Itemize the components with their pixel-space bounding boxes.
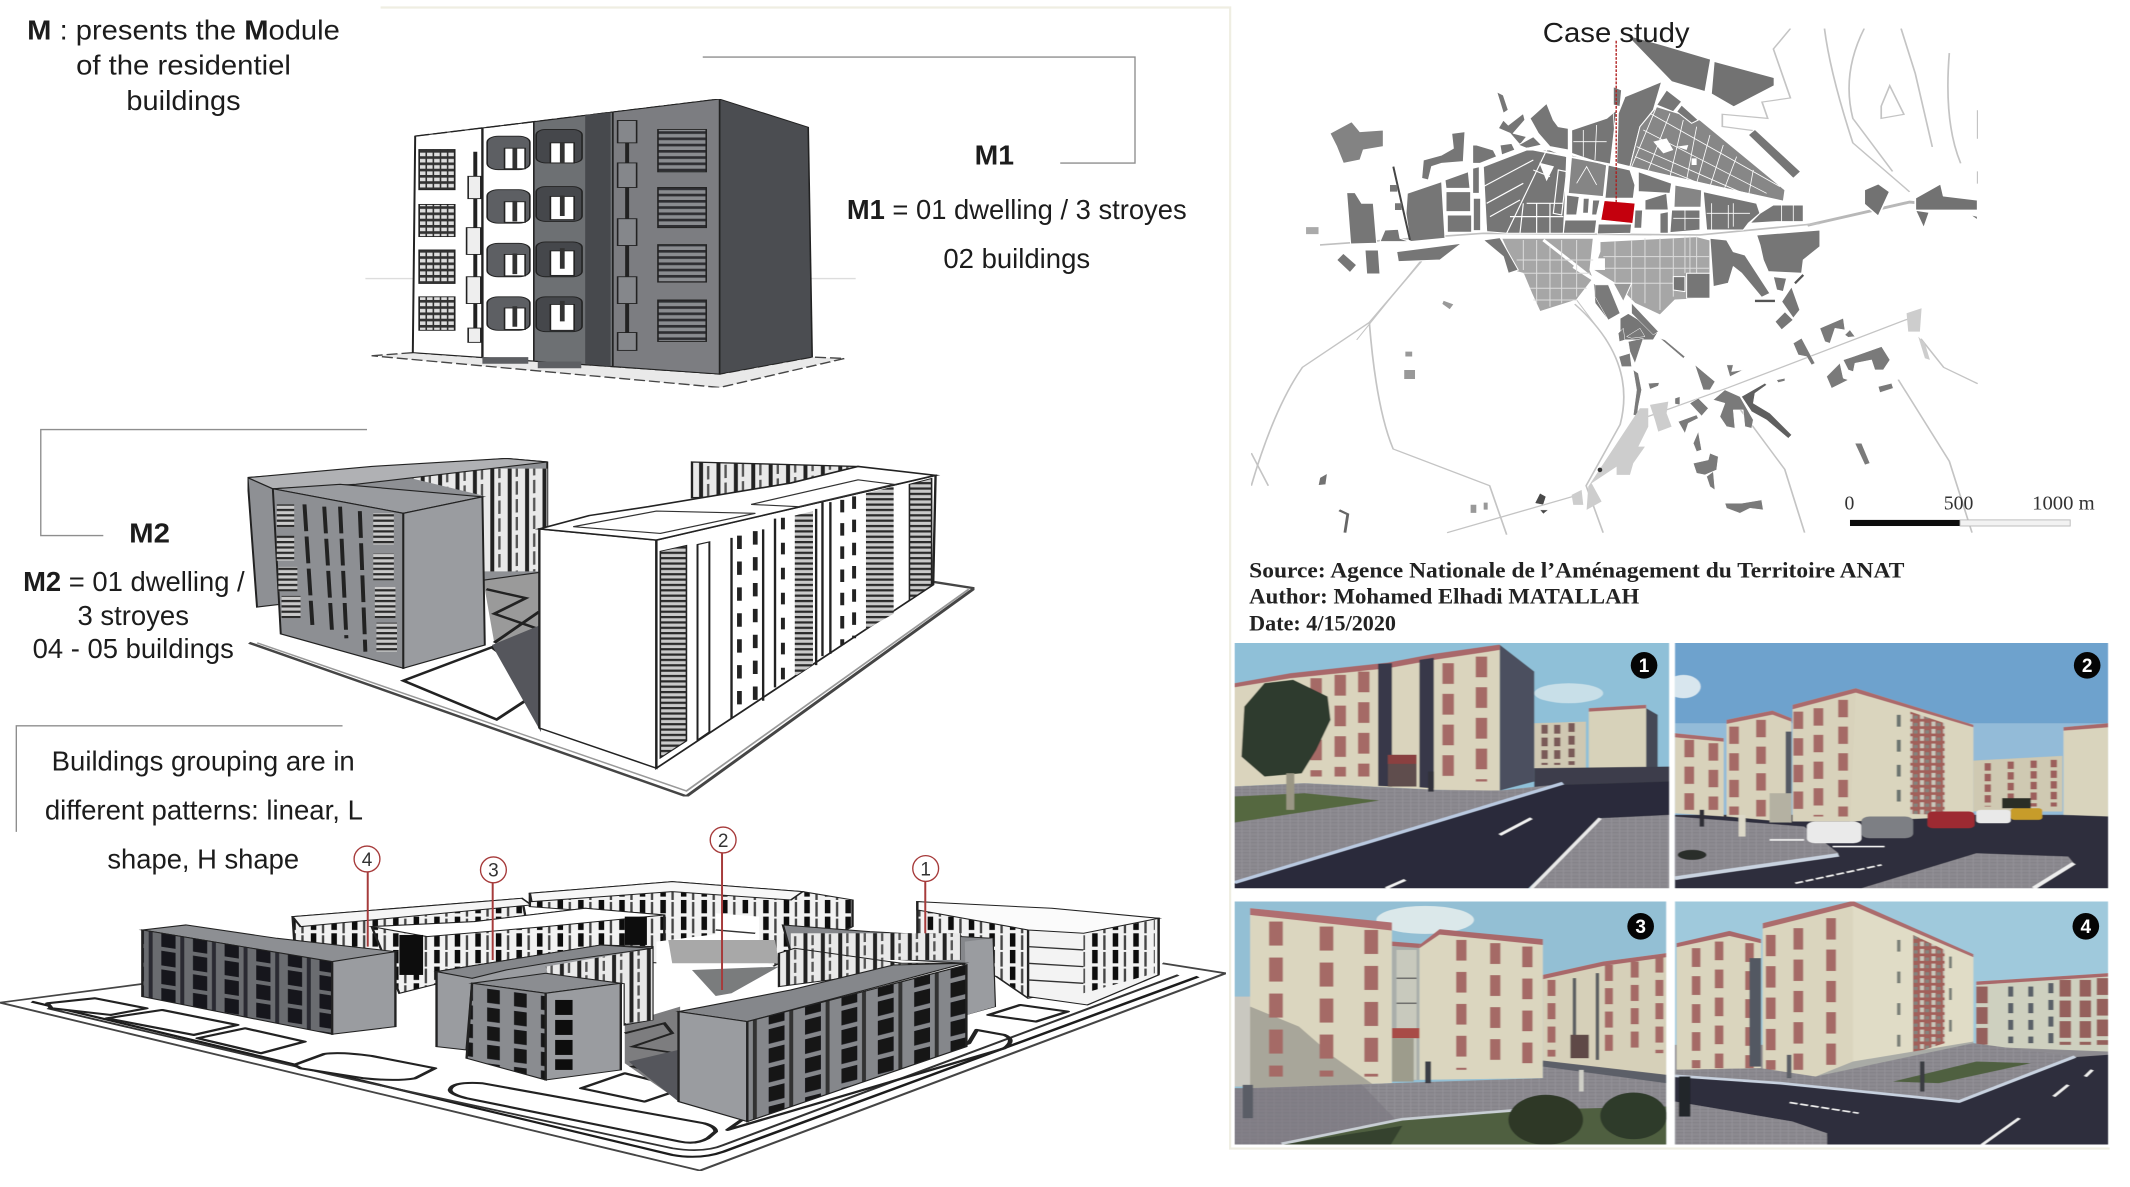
- source credits: Source: Agence Nationale de l’Aménagement du Territoire ANAT: [1249, 559, 1905, 583]
- photo number badges: 4: [2081, 917, 2092, 938]
- source credits: Author: Mohamed Elhadi MATALLAH: [1249, 584, 1639, 608]
- building D: [783, 925, 995, 1015]
- case study plot: [1601, 201, 1635, 223]
- red callout lines: [368, 853, 925, 990]
- M2 title: M2: [129, 517, 170, 548]
- M1 description: M1 = 01 dwelling / 3 stroyes: [847, 194, 1187, 225]
- building A: [142, 925, 395, 963]
- grouping description: [45, 746, 363, 875]
- M2 bracket: [41, 430, 367, 536]
- M2 description: 3 stroyes: [77, 600, 189, 631]
- photo 4: [1675, 901, 2108, 1145]
- panel: grouping patterns: [0, 726, 1226, 1171]
- M2 buildings drawing: [248, 458, 974, 796]
- callout markers: 4: [362, 850, 373, 871]
- source credits: Date: 4/15/2020: [1249, 612, 1396, 636]
- panel: module M1: [365, 57, 1187, 387]
- photo 2: [1666, 643, 2108, 888]
- facade louvers and balconies: [660, 545, 686, 758]
- M1 building drawing: [365, 99, 856, 387]
- outer map: roads, contours and peripheral blocks: [1251, 29, 1978, 535]
- light southern quarter: [1502, 237, 1710, 315]
- grouping description: different patterns: linear, L: [45, 795, 363, 826]
- legend note: module definition: of the residentiel: [76, 50, 291, 81]
- site plate: [249, 579, 974, 796]
- building C: [779, 948, 957, 987]
- balconies: [487, 129, 582, 332]
- site outline and roads: [0, 963, 1226, 1171]
- scale bar: [1845, 493, 2095, 526]
- panel frame line: [381, 7, 2110, 1149]
- case study leader: [1615, 41, 1617, 204]
- service columns: [475, 121, 627, 350]
- street network: [1527, 148, 1783, 202]
- scale bar: 500: [1944, 493, 1973, 515]
- left louvers: [419, 150, 455, 190]
- photo 3: [1235, 902, 1667, 1145]
- grouping bracket: [16, 726, 343, 832]
- courtyard paving: [403, 647, 546, 720]
- courtyard: [656, 933, 779, 1002]
- right white block: [692, 462, 858, 498]
- scale bar: 0: [1845, 493, 1855, 515]
- legend note: module definition: M : presents the Module: [27, 14, 340, 45]
- M1 title: M1: [975, 139, 1014, 170]
- central city fabric: [1320, 82, 1820, 340]
- far white buildings: [293, 898, 530, 967]
- callout markers: [354, 827, 939, 883]
- panel: location map: [1251, 17, 2095, 535]
- scale bar: 1000 m: [2032, 493, 2095, 515]
- callout markers: 2: [718, 831, 728, 852]
- right louvers: [658, 129, 706, 172]
- callout markers: 1: [920, 859, 931, 880]
- north fabric: [1572, 110, 1617, 167]
- centre-west fabric: [1483, 150, 1567, 233]
- M1 description: 02 buildings: [943, 243, 1090, 274]
- M2 description: [23, 566, 245, 664]
- photo number badges: 1: [1639, 656, 1650, 677]
- M2 description: 04 - 05 buildings: [33, 633, 234, 664]
- west blocks: [1347, 193, 1377, 244]
- grouping site drawing: [0, 853, 1226, 1171]
- legend note: module definition: buildings: [126, 85, 241, 116]
- grouping description: Buildings grouping are in: [52, 746, 355, 777]
- central blocks: [1568, 155, 1607, 197]
- callout markers: 3: [488, 861, 499, 882]
- grouping description: shape, H shape: [107, 844, 299, 875]
- legend note: module definition: [27, 14, 340, 116]
- panel: rendered views: [1235, 643, 2108, 1145]
- photo number badges: 2: [2082, 656, 2092, 677]
- source credits: [1249, 559, 1905, 636]
- left grey block: [248, 458, 547, 607]
- photo number badges: 3: [1635, 917, 1646, 938]
- photo 1: [1235, 643, 1669, 888]
- building B: [437, 945, 652, 1050]
- M2 description: M2 = 01 dwelling /: [23, 566, 245, 597]
- panel: module M2: [23, 430, 974, 796]
- M1 bracket: [703, 57, 1135, 163]
- case study label: Case study: [1543, 17, 1690, 48]
- southern map blocks: [1535, 285, 1930, 514]
- M1 description: [847, 194, 1187, 274]
- photo number badges: [1627, 652, 2101, 940]
